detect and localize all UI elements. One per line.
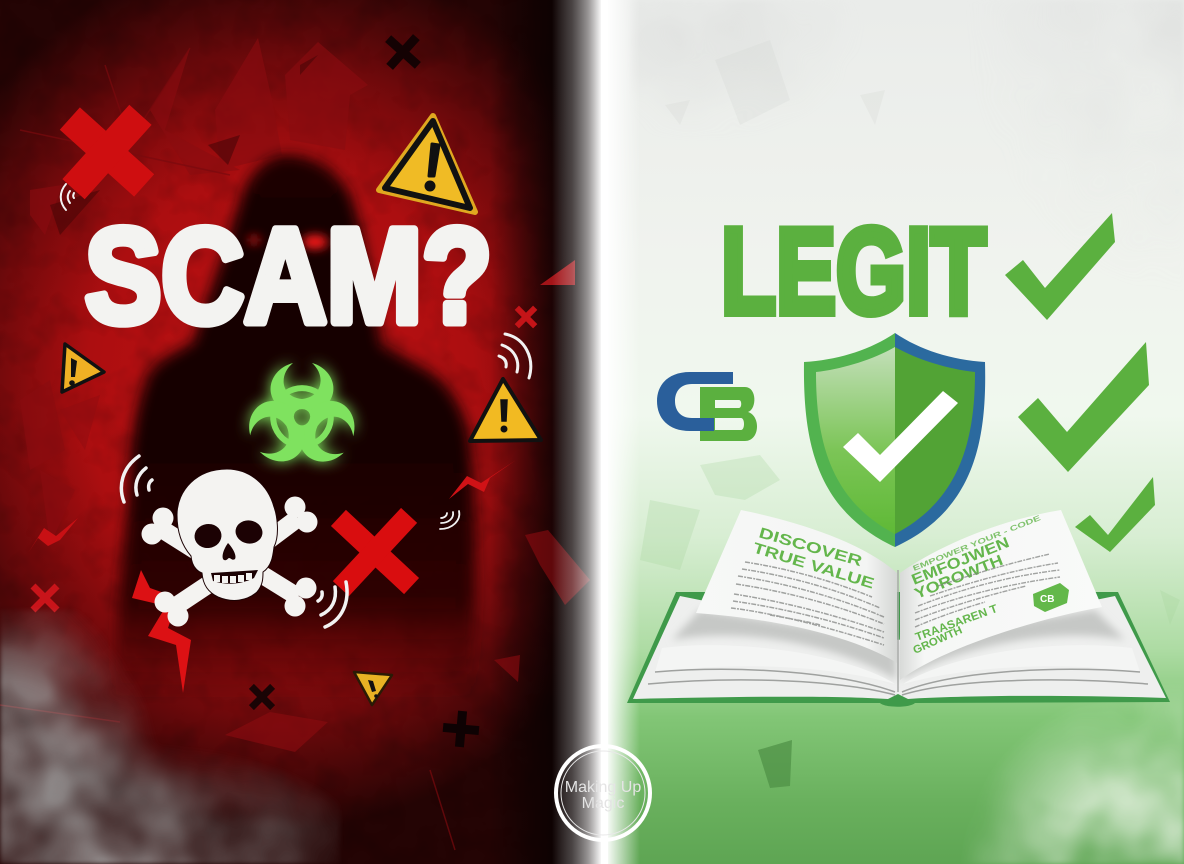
icon: signal arcs small right xyxy=(440,511,459,529)
icon: black X top xyxy=(375,24,431,80)
icon: red lightning right xyxy=(449,460,516,499)
icon: signal arcs top left xyxy=(61,184,74,210)
left page heading: TRUE VALUE xyxy=(751,539,877,592)
icon: warning triangle bottom xyxy=(354,672,392,705)
icon: red X beside skull xyxy=(304,481,446,623)
logo: Making Up Magic badge: Making Up xyxy=(565,779,641,796)
right page headings: GROWTH xyxy=(911,625,964,657)
small CB badge on page: CB xyxy=(1040,594,1054,605)
icon: green check middle xyxy=(1018,342,1149,472)
icon: small red lightning left xyxy=(28,518,78,553)
right page headings: YOROWTH xyxy=(912,551,1005,602)
logo: Making Up Magic badge: Magic xyxy=(582,795,624,812)
icon: green check small xyxy=(1075,477,1155,552)
heading: SCAM?: SCAM? xyxy=(85,202,492,351)
page stack xyxy=(633,596,1166,699)
glowing red eyes xyxy=(247,235,328,249)
icon: small red X right xyxy=(508,299,544,335)
left page xyxy=(696,510,897,663)
icon: warning triangle left xyxy=(62,344,104,392)
panel: legit side background xyxy=(604,0,1184,864)
left page body text lines xyxy=(731,562,884,645)
page fan shading xyxy=(655,610,1140,684)
icon: signal arcs upper right xyxy=(499,334,531,378)
fog: bottom right smoke xyxy=(960,680,1184,864)
icon: black X bottom xyxy=(241,676,283,718)
cranium and jaw xyxy=(177,469,277,600)
right page xyxy=(900,510,1102,680)
heading: LEGIT: LEGIT xyxy=(721,203,986,339)
fog: top haze xyxy=(630,0,1184,300)
small CB badge on page xyxy=(1033,583,1069,612)
right page headings: EMPOWER YOUR - CODE xyxy=(912,514,1042,573)
logo: CB xyxy=(657,372,757,441)
book cover xyxy=(627,592,1170,707)
divider: glowing white line xyxy=(552,0,640,864)
figure: hooded silhouette xyxy=(116,155,475,700)
icon: security shield xyxy=(804,333,985,547)
right page headings: TRAASAREN T xyxy=(914,602,1000,644)
logo: Making Up Magic badge xyxy=(556,746,650,840)
fog: bottom left smoke xyxy=(0,610,340,864)
illustration: open book xyxy=(627,510,1170,707)
icon: signal arcs right of X xyxy=(318,582,347,627)
teeth xyxy=(214,573,252,583)
icon: warning triangle large xyxy=(379,116,475,212)
panel: scam side background xyxy=(0,0,604,864)
icon: small red X left xyxy=(21,574,69,622)
icon: skull and crossbones xyxy=(142,469,318,626)
left page heading: DISCOVER xyxy=(757,524,864,570)
icon: red lightning bolt xyxy=(132,570,191,693)
icon: warning triangle right xyxy=(470,379,541,441)
icon: black cross bottom xyxy=(441,709,481,749)
shield check mark xyxy=(843,391,958,482)
crossbones xyxy=(142,496,318,626)
right page headings: EMFOJWEN xyxy=(909,533,1012,588)
icon: large red X top left xyxy=(36,81,178,223)
right page headings xyxy=(909,514,1042,657)
right page body text lines xyxy=(915,554,1060,627)
icon: signal arcs left of skull xyxy=(121,456,152,502)
icon: biohazard symbol xyxy=(240,363,364,471)
eye sockets and nose xyxy=(193,518,264,584)
icon: green check top xyxy=(1005,213,1115,320)
